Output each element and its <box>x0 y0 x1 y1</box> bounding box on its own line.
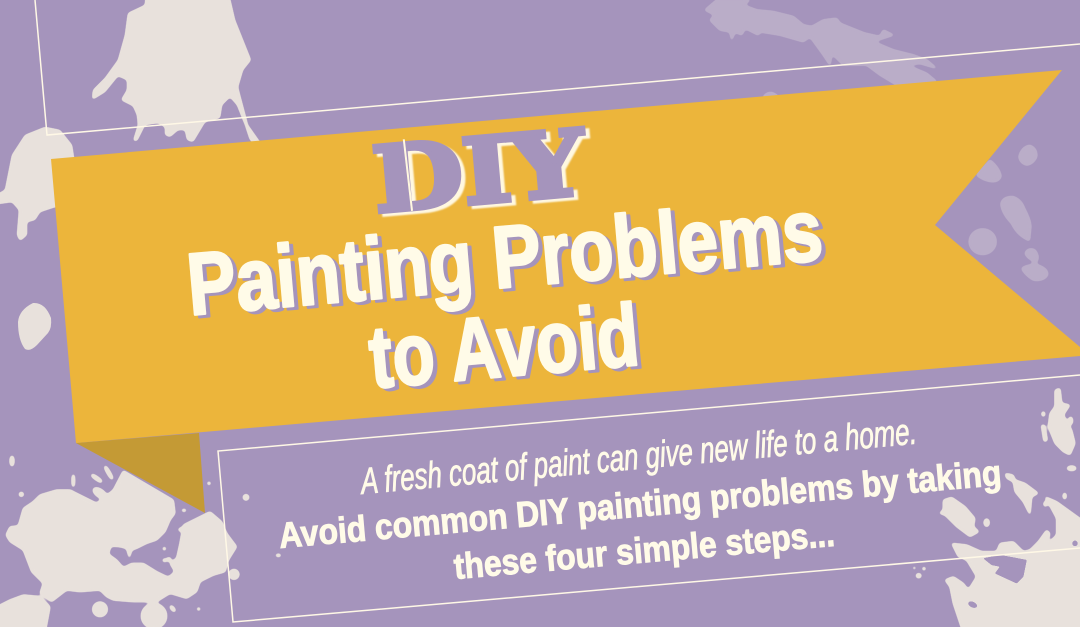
thin frame around intro text <box>218 375 1080 622</box>
intro line bold second: these four simple steps... <box>452 513 836 587</box>
paint splatter left <box>0 127 75 241</box>
paint splatter top left <box>92 0 262 145</box>
yellow ribbon banner <box>51 70 1080 443</box>
intro line bold: Avoid common DIY painting problems by taking <box>277 452 1003 556</box>
banner fold shadow <box>76 433 205 513</box>
heading DIY: DIY <box>369 110 591 234</box>
heading Painting Problems: Painting Problems <box>187 182 830 337</box>
thin frame top <box>35 0 1080 135</box>
paint splatter bottom right inlets <box>967 541 1078 609</box>
paint splatter bottom right <box>913 388 1080 627</box>
heading to Avoid: to Avoid <box>365 285 643 407</box>
paint splatter bottom left <box>0 456 281 627</box>
heading DIY: DIY <box>373 112 595 237</box>
pale paint splatter top right <box>705 0 1048 280</box>
heading to Avoid: to Avoid <box>369 287 647 410</box>
heading Painting Problems: Painting Problems <box>183 180 826 334</box>
paint drop left <box>18 303 51 350</box>
